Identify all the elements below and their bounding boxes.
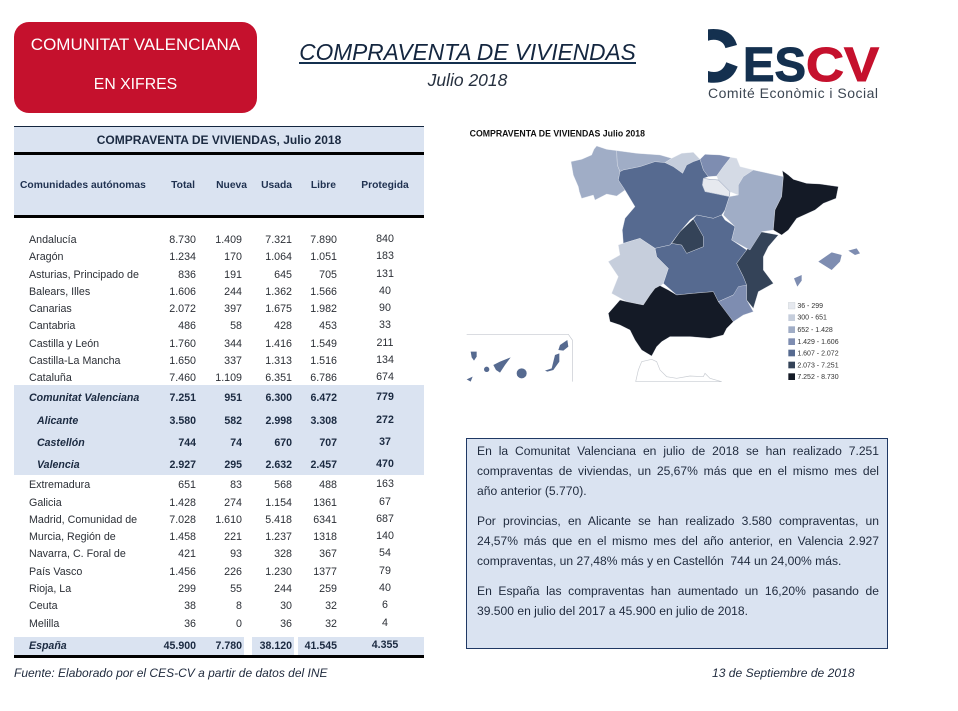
row: Cantabria: 58: [230, 320, 242, 332]
row: Cantabria: 453: [319, 320, 337, 332]
row: Canarias: 1.982: [310, 303, 337, 315]
row: Murcia: Murcia, Región de: [29, 531, 116, 543]
row: Comunitat Valenciana: 951: [224, 392, 242, 404]
row: España: 4.355: [372, 639, 398, 651]
row: Cataluña: Cataluña: [29, 372, 72, 384]
row: Cataluña: [29, 371, 394, 384]
row: Navarra: 367: [319, 548, 337, 560]
row: Galicia: [29, 496, 391, 509]
row: Ceuta: 8: [236, 600, 242, 612]
row: Cataluña: 1.109: [215, 372, 242, 384]
row: Rioja: 259: [319, 583, 337, 595]
row: Galicia: 67: [379, 496, 391, 508]
row: Castellón: [37, 436, 391, 449]
row: Comunitat Valenciana: 6.300: [265, 392, 292, 404]
map title: COMPRAVENTA DE VIVIENDAS Julio 2018: [470, 129, 645, 139]
column headers: Nueva: [216, 180, 247, 191]
row: Comunitat Valenciana: 779: [376, 391, 394, 403]
row: España: 38.120: [260, 640, 292, 652]
row: Balears: 40: [379, 285, 391, 297]
row: Alicante: 2.998: [265, 415, 292, 427]
row: Rioja: 40: [379, 582, 391, 594]
row: Asturias: Asturias, Principado de: [29, 269, 139, 281]
badge line 1: COMUNITAT VALENCIANA: [31, 35, 240, 54]
row: Aragón: [29, 250, 394, 263]
legend: [788, 302, 839, 381]
row: País Vasco: [29, 565, 391, 578]
badge: Comunitat Valenciana en xifres: [14, 22, 257, 113]
row: Cantabria: 33: [379, 319, 391, 331]
table bottom rule: [14, 655, 424, 658]
row: Extremadura: [29, 478, 394, 491]
row: Madrid: [29, 513, 394, 526]
row: Castilla y León: 1.549: [310, 338, 337, 350]
row: Valencia: [37, 458, 394, 471]
row: Andalucía: 840: [376, 233, 394, 245]
subtitle: date: Julio 2018: [428, 70, 507, 90]
row: Ceuta: [29, 599, 388, 612]
column headers: Protegida: [361, 180, 409, 191]
row: Castellón: 707: [319, 437, 337, 449]
row: España: España: [29, 640, 67, 652]
row: Andalucía: [29, 233, 394, 246]
legend: 1.429 - 1.606: [797, 339, 839, 346]
row: Rioja: Rioja, La: [29, 583, 71, 595]
row: Valencia: Valencia: [37, 459, 80, 471]
row: Melilla: [29, 617, 388, 630]
row: Asturias: [29, 268, 394, 281]
row: Castilla y León: 344: [224, 338, 242, 350]
row: Castellón: 74: [230, 437, 242, 449]
row: Canarias: Canarias: [29, 303, 72, 315]
row: Asturias: 705: [319, 269, 337, 281]
row: Galicia: 1.154: [265, 497, 292, 509]
row: Ceuta: 38: [184, 600, 196, 612]
row: Asturias: 836: [178, 269, 196, 281]
row: Galicia: 1361: [313, 497, 337, 509]
row: Castilla y León: 211: [376, 337, 394, 349]
row: Aragón: 170: [224, 251, 242, 263]
row: Aragón: 1.064: [265, 251, 292, 263]
row: Galicia: 274: [224, 497, 242, 509]
row: Balears: 244: [224, 286, 242, 298]
row: Murcia: 1.237: [265, 531, 292, 543]
legend: 652 - 1.428: [797, 327, 833, 334]
row: Navarra: 54: [379, 547, 391, 559]
legend: 300 - 651: [797, 315, 827, 322]
legend: 2.073 - 7.251: [797, 362, 839, 369]
row: País Vasco: 79: [379, 565, 391, 577]
row: Ceuta: 30: [280, 600, 292, 612]
row: Canarias: 1.675: [265, 303, 292, 315]
Ceuta and Melilla outline: [636, 359, 722, 382]
paragraph 2: provincias: 24,57% más que en el mismo mes del año anterior, en Valencia 2.927: [477, 534, 879, 548]
table title band: [14, 126, 424, 152]
column headers: [20, 180, 409, 191]
row: Valencia: 2.457: [310, 459, 337, 471]
row: Extremadura: 568: [274, 479, 292, 491]
legend: 36 - 299: [797, 303, 823, 310]
row: Navarra: 93: [230, 548, 242, 560]
row: Navarra: Navarra, C. Foral de: [29, 548, 126, 560]
row: Rioja: 299: [178, 583, 196, 595]
row: España: 45.900: [164, 640, 196, 652]
row: Asturias: 645: [274, 269, 292, 281]
row: Madrid: 1.610: [215, 514, 242, 526]
paragraph 2: provincias: compraventas, un 27,48% más y en Castellón 744 un 24,00% más.: [477, 554, 841, 568]
row: Andalucía: 1.409: [215, 234, 242, 246]
row: Balears: [29, 285, 391, 298]
row: Castellón: 744: [178, 437, 196, 449]
row: Madrid: Madrid, Comunidad de: [29, 514, 137, 526]
row: Valencia: 2.927: [169, 459, 196, 471]
row: Alicante: [36, 414, 394, 427]
row: Ceuta: Ceuta: [29, 600, 58, 612]
regions: [571, 146, 838, 356]
row: Asturias: 191: [224, 269, 242, 281]
badge line 2: EN XIFRES: [94, 76, 177, 93]
row: Cantabria: 486: [178, 320, 196, 332]
Balearic Islands: [794, 248, 860, 287]
column headers: Total: [171, 180, 195, 191]
row: Castilla-La Mancha: Castilla-La Mancha: [29, 355, 120, 367]
row: Extremadura: 163: [376, 478, 394, 490]
source note: Fuente: Elaborado por el CES-CV a partir de datos del INE: [14, 666, 328, 680]
row: Castilla-La Mancha: 134: [376, 354, 394, 366]
row: Castilla-La Mancha: 1.313: [265, 355, 292, 367]
row: Cantabria: Cantabria: [29, 320, 75, 332]
row: Murcia: 1318: [313, 531, 337, 543]
row: Castilla y León: 1.760: [169, 338, 196, 350]
total band: España: [14, 637, 424, 655]
row: Madrid: 687: [376, 513, 394, 525]
paragraph 1: Comunitat Valenciana: [477, 444, 879, 498]
row: España: 41.545: [305, 640, 337, 652]
paragraph 1: Comunitat Valenciana: compraventas de viviendas, un 25,67% más que en el mismo mes del: [477, 464, 879, 478]
row: Canarias: [29, 302, 391, 315]
row: Melilla: 36: [184, 618, 196, 630]
row: Navarra: 328: [274, 548, 292, 560]
row: País Vasco: 1.230: [265, 566, 292, 578]
row: Extremadura: 651: [178, 479, 196, 491]
row: Navarra: [29, 547, 391, 560]
paragraph 2: provincias: [477, 514, 879, 568]
row: Cataluña: 674: [376, 371, 394, 383]
row: Andalucía: Andalucía: [29, 234, 77, 246]
row: Melilla: 4: [382, 617, 388, 629]
text panel: summary: [466, 438, 888, 649]
row: Canarias: 90: [379, 302, 391, 314]
row: Andalucía: 8.730: [169, 234, 196, 246]
row: Asturias: 131: [376, 268, 394, 280]
row: País Vasco: 1.456: [169, 566, 196, 578]
row: España: 7.780: [215, 640, 242, 652]
row: Balears: 1.362: [265, 286, 292, 298]
choropleth map of Spain: [466, 129, 860, 382]
row: Cantabria: 428: [274, 320, 292, 332]
row: Comunitat Valenciana: 6.472: [310, 392, 337, 404]
row: Castilla-La Mancha: 337: [224, 355, 242, 367]
row: Valencia: 470: [376, 458, 394, 470]
row: Aragón: Aragón: [29, 251, 63, 263]
row: Navarra: 421: [178, 548, 196, 560]
row: Balears: 1.606: [169, 286, 196, 298]
highlight band: Comunitat Valenciana: [14, 385, 424, 475]
row: Balears: Balears, Illes: [29, 286, 90, 298]
row: Ceuta: 32: [325, 600, 337, 612]
Canary Islands inset: [467, 334, 572, 382]
table: compraventa por comunidades: [14, 126, 424, 658]
row: Melilla: 32: [325, 618, 337, 630]
row: Valencia: 2.632: [265, 459, 292, 471]
row: Castilla y León: [29, 337, 394, 350]
row: Melilla: Melilla: [29, 618, 59, 630]
logo: CESCV: ES: [743, 39, 806, 92]
legend: 1.607 - 2.072: [797, 350, 839, 357]
logo: CESCV: Comité Econòmic i Social: [708, 85, 878, 101]
row: Castilla y León: Castilla y León: [29, 338, 99, 350]
row: Castellón: Castellón: [37, 437, 85, 449]
row: Rioja: 244: [274, 583, 292, 595]
row: Cantabria: [29, 319, 391, 332]
row: Extremadura: Extremadura: [29, 479, 90, 491]
row: Castilla-La Mancha: 1.650: [169, 355, 196, 367]
row: Andalucía: 7.321: [265, 234, 292, 246]
column headers: Comunidades autónomas: [20, 180, 146, 191]
row: Castilla y León: 1.416: [265, 338, 292, 350]
row: Galicia: Galicia: [29, 497, 62, 509]
row: Madrid: 6341: [313, 514, 337, 526]
column headers: Usada: [261, 180, 292, 191]
row: Castilla-La Mancha: 1.516: [310, 355, 337, 367]
date note: 13 de Septiembre de 2018: [712, 666, 855, 680]
paragraph 1: Comunitat Valenciana: año anterior (5.770).: [477, 484, 587, 498]
paragraph 3: España: 39.500 en julio del 2017 a 45.900 en julio de 2018.: [477, 604, 748, 618]
row: País Vasco: País Vasco: [29, 566, 82, 578]
row: Castilla-La Mancha: [29, 354, 394, 367]
row: Aragón: 183: [376, 250, 394, 262]
logo: CESCV: CV: [806, 39, 879, 92]
row: País Vasco: 1377: [313, 566, 337, 578]
row: Rioja: [29, 582, 391, 595]
row: Murcia: 140: [376, 530, 394, 542]
row: Alicante: 3.580: [169, 415, 196, 427]
legend: 7.252 - 8.730: [797, 374, 839, 381]
row: Comunitat Valenciana: [29, 391, 394, 404]
row: Extremadura: 488: [319, 479, 337, 491]
row: Valencia: 295: [224, 459, 242, 471]
row: Alicante: 272: [376, 414, 394, 426]
row: Canarias: 397: [224, 303, 242, 315]
paragraph 3: España: [477, 584, 879, 618]
row: Aragón: 1.051: [310, 251, 337, 263]
row: Murcia: 1.458: [169, 531, 196, 543]
paragraph 1: Comunitat Valenciana: En la Comunitat Valenciana en julio de 2018 se han realizado 7.251: [477, 444, 879, 458]
row: Aragón: 1.234: [169, 251, 196, 263]
title: COMPRAVENTA DE VIVIENDAS: [299, 39, 636, 65]
row: Alicante: 3.308: [310, 415, 337, 427]
row: Comunitat Valenciana: Comunitat Valenciana: [29, 392, 139, 404]
row: Canarias: 2.072: [169, 303, 196, 315]
row: España: [29, 639, 398, 652]
row: Melilla: 36: [280, 618, 292, 630]
row: Andalucía: 7.890: [310, 234, 337, 246]
table title band: COMPRAVENTA DE VIVIENDAS, Julio 2018: [97, 133, 341, 147]
row: Galicia: 1.428: [169, 497, 196, 509]
row: Melilla: 0: [236, 618, 242, 630]
row: Madrid: 5.418: [265, 514, 292, 526]
column headers: Libre: [311, 180, 336, 191]
row: Alicante: 582: [224, 415, 242, 427]
row: Balears: 1.566: [310, 286, 337, 298]
row: Cataluña: 7.460: [169, 372, 196, 384]
row: Castellón: 37: [379, 436, 391, 448]
paragraph 2: provincias: Por provincias, en Alicante se han realizado 3.580 compraventas, un: [477, 514, 879, 528]
row: Cataluña: 6.786: [310, 372, 337, 384]
row: Madrid: 7.028: [169, 514, 196, 526]
row: País Vasco: 226: [224, 566, 242, 578]
row: Cataluña: 6.351: [265, 372, 292, 384]
row: Comunitat Valenciana: 7.251: [169, 392, 196, 404]
logo: CESCV: [708, 29, 880, 101]
row: Alicante: Alicante: [37, 415, 78, 427]
table header band: [14, 152, 424, 218]
row: Murcia: [29, 530, 394, 543]
row: Castellón: 670: [274, 437, 292, 449]
row: Rioja: 55: [230, 583, 242, 595]
paragraph 3: España: En España las compraventas han aumentado un 16,20% pasando de: [477, 584, 879, 598]
row: Extremadura: 83: [230, 479, 242, 491]
row: Murcia: 221: [224, 531, 242, 543]
row: Ceuta: 6: [382, 599, 388, 611]
